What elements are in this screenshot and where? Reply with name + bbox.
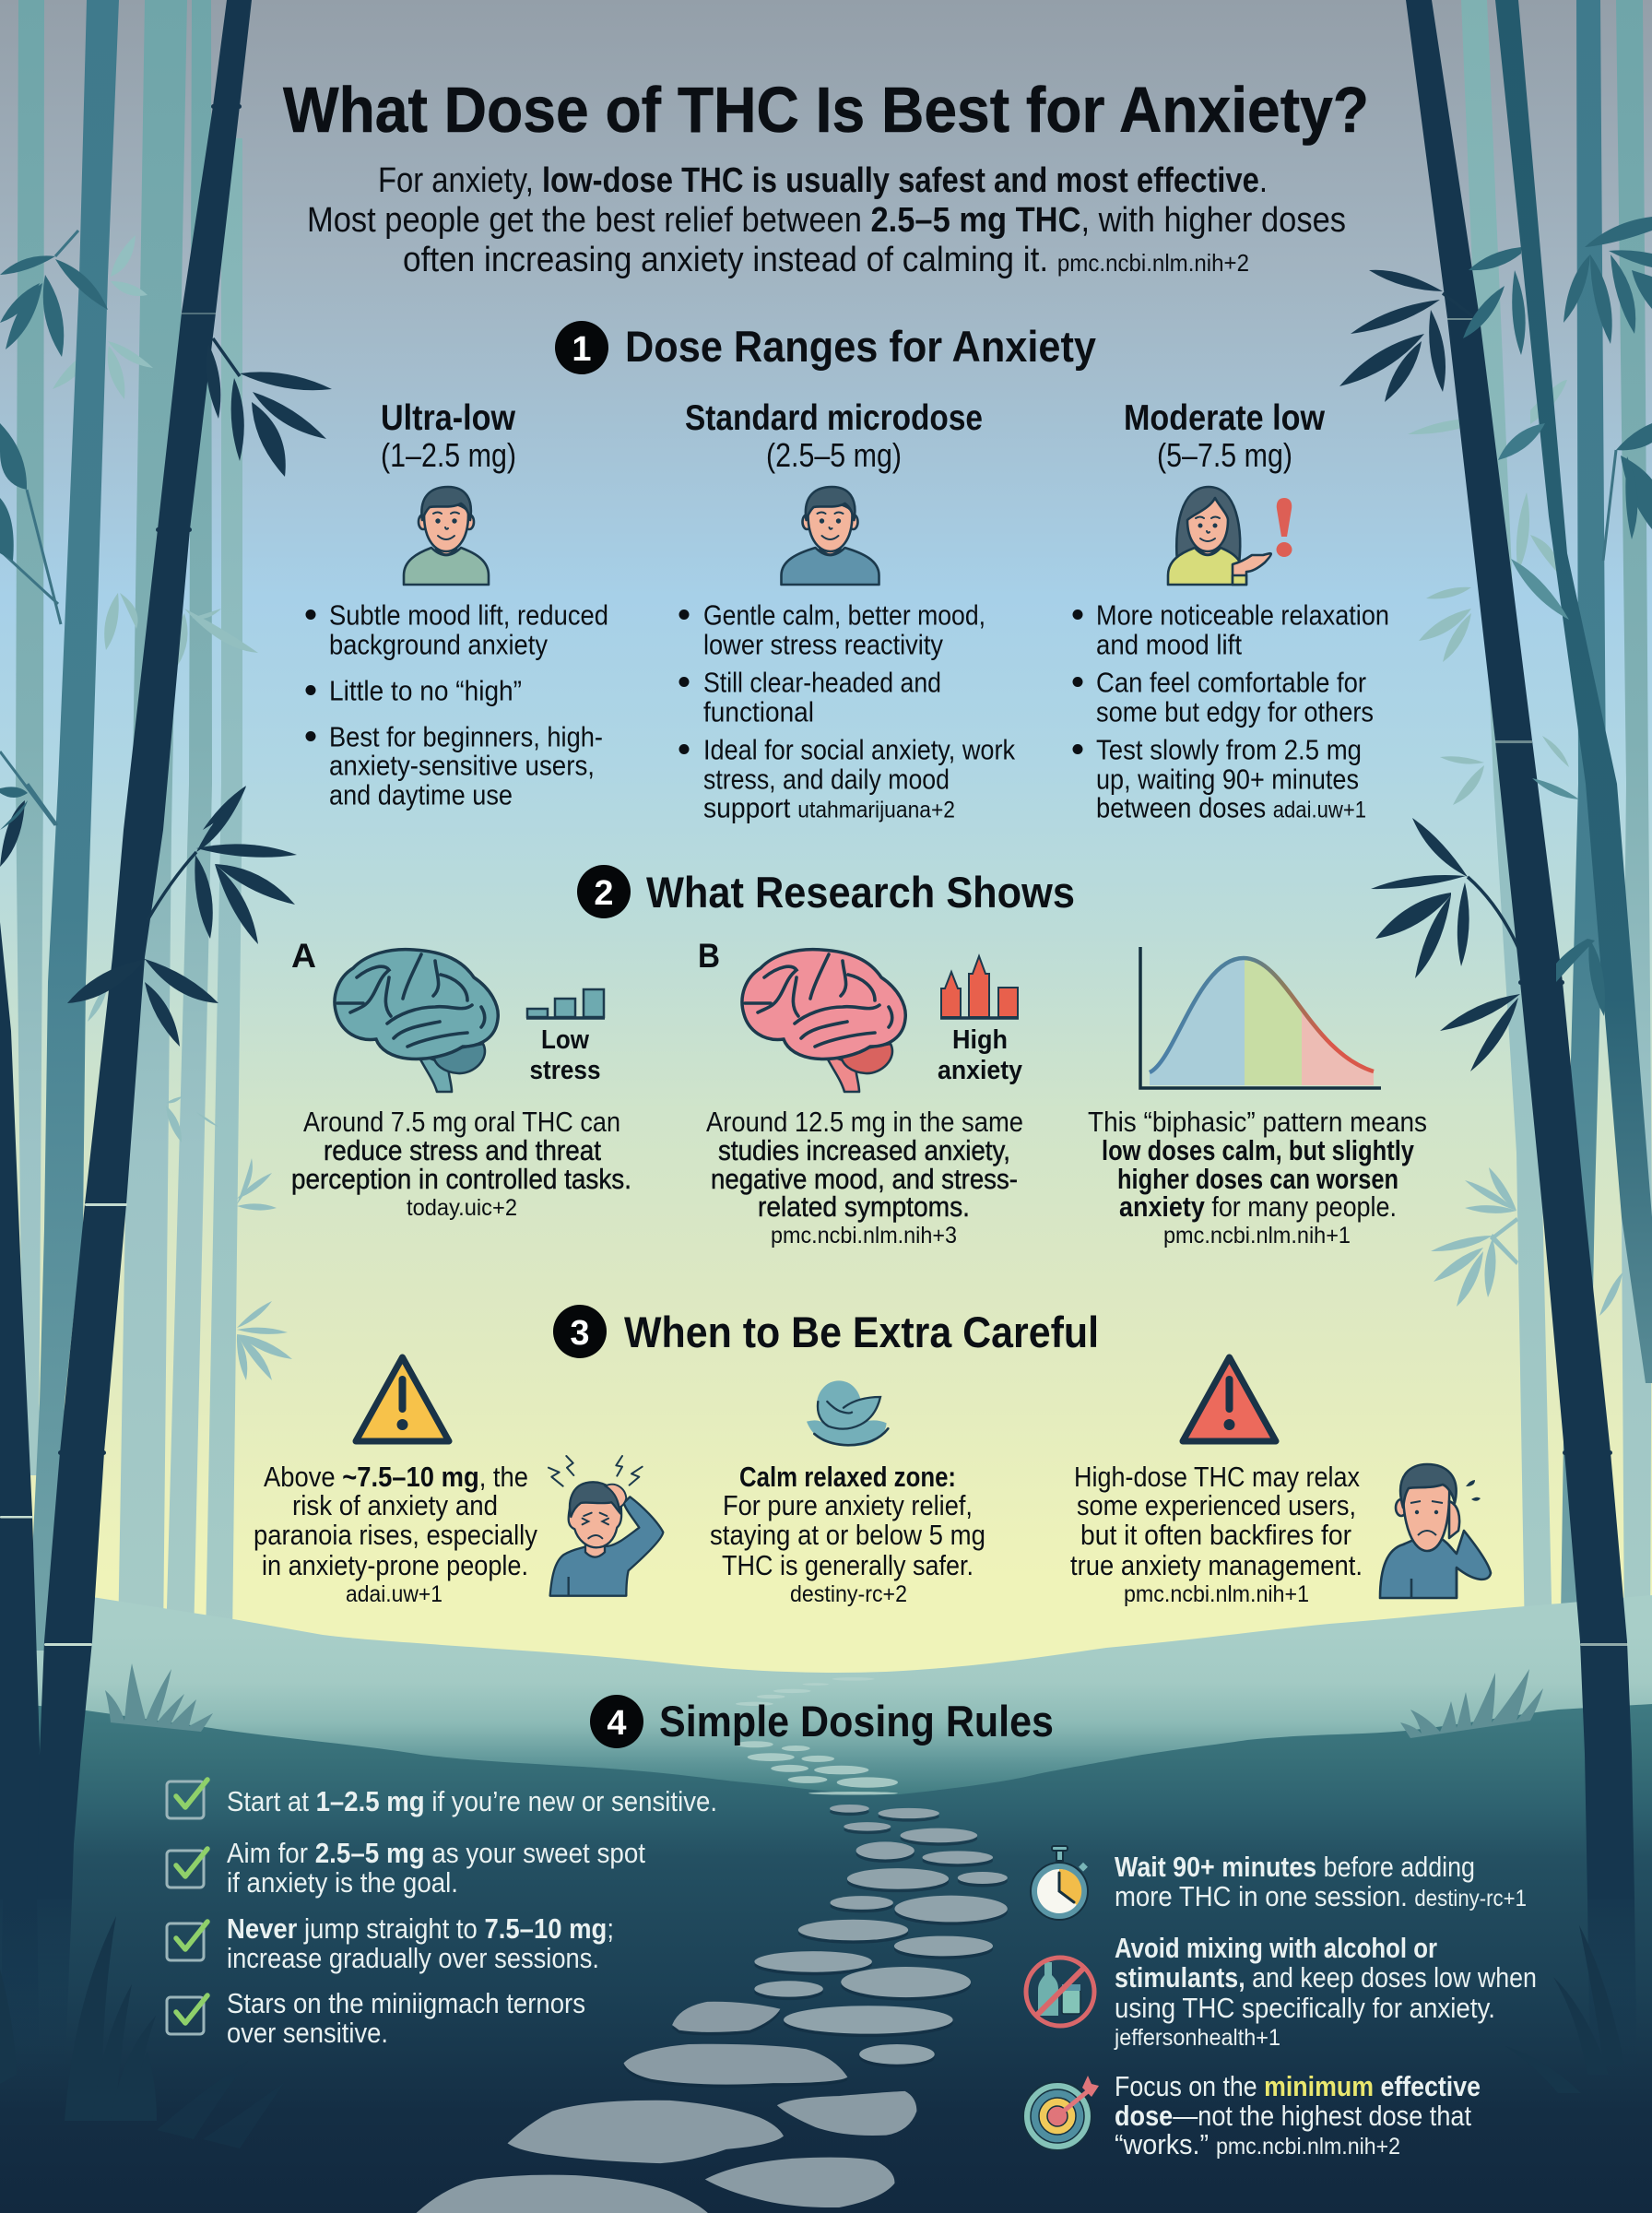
bullet list — [306, 599, 608, 811]
bullet list: some but edgy for others — [1096, 695, 1374, 728]
heading: standard microdose: Standard microdose — [685, 398, 983, 438]
bullet list: Little to no “high” — [329, 675, 522, 706]
section 3 heading: when to be careful: When to Be Extra Careful — [624, 1308, 1099, 1356]
grass tufts on the hill — [105, 1663, 1543, 1738]
panel: avoid mixing: stimulants, and keep doses low when — [1115, 1961, 1537, 1994]
body text — [710, 1461, 985, 1607]
heading: moderate low: Moderate low — [1124, 398, 1326, 438]
panel: minimum effective dose: Focus on the minimum effective — [1115, 2070, 1481, 2102]
body text: anxiety for many people. — [1119, 1190, 1397, 1223]
mid bamboo stalks — [28, 0, 1652, 1651]
ground: light hill — [0, 1586, 1652, 1844]
panel: biphasic chart — [1088, 947, 1427, 1249]
body text: pmc.ncbi.nlm.nih+1 — [1163, 1223, 1351, 1249]
panel: checklist rules — [167, 1780, 717, 2049]
body text: adai.uw+1 — [346, 1581, 442, 1607]
panel: wait 90 minutes: more THC in one session. destiny-rc+1 — [1115, 1880, 1527, 1912]
panel: minimum effective dose: “works.” pmc.ncbi.nlm.nih+2 — [1115, 2128, 1400, 2160]
stepping stone path — [416, 1677, 1008, 2213]
bullet list: anxiety-sensitive users, — [329, 749, 595, 782]
icon: red brain — [742, 950, 905, 1092]
panel: study A low stress — [291, 937, 631, 1221]
body text: Calm relaxed zone: — [739, 1461, 956, 1493]
icon: worried person hand to ear — [1380, 1464, 1491, 1598]
panel: study B high anxiety — [698, 937, 1023, 1249]
panel: wait 90 minutes: Wait 90+ minutes before adding — [1115, 1851, 1475, 1883]
bullet list: Can feel comfortable for — [1096, 666, 1366, 699]
icon: red exclamation mark — [1276, 498, 1292, 557]
body text: low doses calm, but slightly — [1102, 1134, 1415, 1166]
body text: higher doses can worsen — [1117, 1163, 1398, 1195]
body text: risk of anxiety and — [292, 1489, 498, 1521]
rule 3 — [167, 1912, 614, 1974]
bullet list: lower stress reactivity — [703, 629, 943, 660]
label low stress: stress — [529, 1056, 601, 1085]
body text: in anxiety-prone people. — [262, 1549, 528, 1581]
bullet list: between doses adai.uw+1 — [1096, 791, 1366, 824]
body text: today.uic+2 — [407, 1195, 517, 1221]
bullet list: background anxiety — [329, 629, 548, 660]
panel: above 7.5 mg warning — [254, 1357, 663, 1607]
rule 4: over sensitive. — [227, 2017, 388, 2049]
bullet list: functional — [703, 695, 814, 728]
rule 2: Aim for 2.5–5 mg as your sweet spot — [227, 1837, 645, 1869]
intro paragraph: For anxiety, low-dose THC is usually safest and most effective. — [378, 161, 1268, 200]
bullet list: More noticeable relaxation — [1096, 599, 1389, 631]
body text: some experienced users, — [1077, 1489, 1356, 1521]
icon: target with arrow — [1023, 2076, 1099, 2150]
icon: yellow warning triangle — [356, 1357, 449, 1441]
body text: Above ~7.5–10 mg, the — [264, 1461, 528, 1493]
body text: true anxiety management. — [1070, 1549, 1363, 1581]
teal mid-ground leaves and twigs — [0, 217, 1652, 1016]
bullet list: Subtle mood lift, reduced — [329, 599, 608, 631]
panel: avoid mixing: Avoid mixing with alcohol or — [1115, 1932, 1437, 1964]
panel: avoid mixing — [1026, 1932, 1537, 2051]
rule 2 — [167, 1837, 645, 1899]
bullet list: Ideal for social anxiety, work — [703, 734, 1015, 765]
body text: High-dose THC may relax — [1074, 1461, 1360, 1493]
rule 4 — [167, 1987, 585, 2049]
icon: stopwatch — [1031, 1846, 1088, 1920]
dark grass in foreground — [0, 1916, 1624, 2148]
icon: person smiling green shirt — [404, 487, 489, 585]
bullet list: Still clear-headed and — [703, 666, 941, 699]
intro paragraph — [307, 161, 1346, 279]
body text: reduce stress and threat — [324, 1134, 601, 1166]
panel: minimum effective dose — [1023, 2070, 1481, 2160]
body text — [706, 1106, 1023, 1249]
body text: pmc.ncbi.nlm.nih+3 — [771, 1223, 957, 1249]
section 4 heading: dosing rules: Simple Dosing Rules — [659, 1697, 1054, 1746]
body text: studies increased anxiety, — [718, 1134, 1010, 1166]
section 2 heading: research: 2 — [594, 874, 614, 913]
panel: wait 90 minutes — [1031, 1846, 1527, 1920]
body text: Around 12.5 mg in the same — [706, 1106, 1023, 1138]
dark foreground leaves and twigs — [0, 270, 1520, 1071]
body text: THC is generally safer. — [722, 1549, 974, 1581]
icon: person smiling blue shirt — [782, 487, 879, 585]
bullet list: up, waiting 90+ minutes — [1096, 763, 1359, 795]
label low stress: Low — [541, 1025, 589, 1055]
chart: biphasic dose-response curve — [1140, 947, 1381, 1088]
rule 2: if anxiety is the goal. — [227, 1866, 458, 1899]
bullet list: Best for beginners, high- — [329, 721, 603, 752]
section 1 heading: dose ranges: 1 — [572, 330, 592, 369]
label A: A — [291, 937, 316, 975]
body text — [254, 1461, 537, 1607]
icon: rising red bars — [940, 956, 1019, 1018]
panel: avoid mixing: using THC specifically for anxiety. — [1115, 1992, 1495, 2024]
intro paragraph: often increasing anxiety instead of calming it. pmc.ncbi.nlm.nih+2 — [403, 241, 1249, 279]
bamboo forest background stalks — [16, 0, 1652, 1678]
body text — [291, 1106, 631, 1221]
bullet list: and daytime use — [329, 778, 513, 811]
dose range label: (2.5–5 mg) — [766, 436, 902, 474]
bullet list — [678, 599, 1015, 824]
icon: calm leaf — [807, 1380, 888, 1447]
pale background leaves — [53, 235, 1622, 1380]
body text: pmc.ncbi.nlm.nih+1 — [1124, 1581, 1309, 1607]
icon: red warning triangle — [1183, 1357, 1276, 1441]
rule 1: Start at 1–2.5 mg if you’re new or sensitive. — [227, 1785, 717, 1817]
bullet list — [1073, 599, 1389, 824]
panel: avoid mixing: jeffersonhealth+1 — [1114, 2025, 1280, 2051]
section 2 heading: research: What Research Shows — [646, 868, 1075, 917]
label high anxiety: anxiety — [938, 1056, 1022, 1085]
label high anxiety — [938, 1025, 1022, 1085]
panel: minimum effective dose: dose—not the highest dose that — [1115, 2100, 1471, 2132]
panel: standard microdose — [678, 398, 1015, 824]
body text: but it often backfires for — [1080, 1519, 1351, 1551]
body text — [1070, 1461, 1363, 1607]
rule 3: Never jump straight to 7.5–10 mg; — [227, 1912, 614, 1945]
body text: Around 7.5 mg oral THC can — [303, 1106, 620, 1138]
section 1 heading: dose ranges: Dose Ranges for Anxiety — [625, 322, 1096, 371]
rule 3: increase gradually over sessions. — [227, 1942, 599, 1974]
panel: ultra-low dose — [306, 398, 608, 811]
panel: moderate low — [1073, 398, 1389, 824]
ground: dark hill — [0, 1702, 1652, 2213]
bullet list: support utahmarijuana+2 — [703, 791, 955, 824]
icon: stressed person holding head — [549, 1456, 663, 1596]
panel: high dose warning — [1070, 1357, 1491, 1607]
icon: no alcohol or stimulants — [1026, 1958, 1094, 2026]
label high anxiety: High — [952, 1025, 1008, 1055]
icon: low bars — [526, 989, 605, 1018]
body text: destiny-rc+2 — [790, 1581, 907, 1607]
dose range label: (1–2.5 mg) — [381, 436, 516, 474]
label B: B — [698, 937, 720, 975]
body text: perception in controlled tasks. — [291, 1163, 631, 1195]
heading: ultra-low: Ultra-low — [381, 398, 516, 438]
body text — [1088, 1106, 1427, 1249]
panel: calm relaxed zone — [710, 1380, 985, 1607]
bullet list: and mood lift — [1096, 629, 1242, 660]
body text: For pure anxiety relief, — [723, 1489, 973, 1521]
dose range label: (5–7.5 mg) — [1157, 436, 1292, 474]
body text: staying at or below 5 mg — [710, 1519, 985, 1551]
icon: woman with hand out — [1168, 487, 1271, 585]
bullet list: Gentle calm, better mood, — [703, 599, 985, 631]
bullet list: stress, and daily mood — [703, 763, 950, 795]
body text: negative mood, and stress- — [711, 1163, 1018, 1195]
bullet list: Test slowly from 2.5 mg — [1096, 734, 1362, 765]
rule 4: Stars on the miniigmach ternors — [227, 1987, 585, 2019]
title: What Dose of THC Is Best for Anxiety? — [283, 74, 1369, 146]
label low stress — [529, 1025, 601, 1085]
background sky gradient — [0, 0, 1652, 1752]
intro paragraph: Most people get the best relief between 2.5–5 mg THC, with higher doses — [307, 201, 1346, 240]
bamboo node rings — [0, 313, 1628, 1646]
body text: related symptoms. — [758, 1190, 970, 1223]
section 4 heading: dosing rules: 4 — [607, 1704, 627, 1743]
body text: paranoia rises, especially — [254, 1519, 537, 1551]
body text: This “biphasic” pattern means — [1088, 1106, 1427, 1138]
section 3 heading: when to be careful: 3 — [570, 1314, 590, 1353]
icon: teal brain — [335, 950, 498, 1092]
